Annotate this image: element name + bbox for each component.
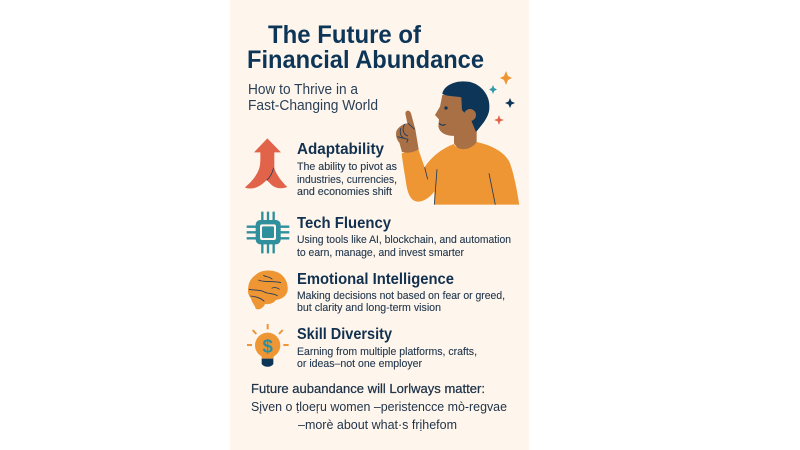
text block: tech fluency: Using tools like AI, blockchain, and automation [297, 234, 511, 246]
icon: brain [248, 271, 288, 309]
panel: background [230, 0, 529, 450]
icon: orange sparkle [500, 71, 512, 85]
subtitle: How to Thrive in a [248, 82, 359, 98]
text block: tech fluency: to earn, manage, and invest smarter [297, 247, 464, 259]
text block: skill diversity: Earning from multiple platforms, crafts, [297, 346, 477, 358]
text block: tech fluency [297, 215, 511, 259]
text block: skill diversity: or ideas–not one employer [297, 358, 422, 370]
text block: skill diversity [297, 326, 477, 370]
title: The Future of [268, 21, 422, 49]
closing statement: –morè about what·s frịhefom [298, 417, 457, 432]
text block: emotional intelligence: Making decisions not based on fear or greed, [297, 290, 505, 302]
text block: skill diversity: Skill Diversity [297, 326, 392, 343]
closing statement: Sįven o ṭloeŗu women –peristencce mò-regvae [251, 399, 507, 414]
text block: adaptability: The ability to pivot as [297, 161, 397, 173]
icon: adaptability arrow [245, 138, 287, 188]
icon: red sparkle [494, 115, 504, 125]
text block: tech fluency: Tech Fluency [297, 215, 391, 232]
text block: emotional intelligence: Emotional Intelligence [297, 271, 454, 288]
text block: adaptability: industries, currencies, [297, 174, 397, 186]
icon: microchip [247, 212, 289, 253]
title [247, 21, 484, 74]
text block: adaptability: and economies shift [297, 186, 392, 198]
icon: lightbulb with dollar: $ [262, 335, 273, 356]
text block: emotional intelligence [297, 271, 505, 314]
icon: lightbulb with dollar [247, 324, 289, 367]
subtitle: Fast-Changing World [248, 98, 378, 114]
text block: adaptability [297, 141, 397, 198]
text block: adaptability: Adaptability [297, 141, 384, 158]
closing statement: Future aubandance will Lorlways matter: [251, 381, 485, 396]
icon: teal sparkle [489, 85, 497, 94]
subtitle [248, 82, 378, 114]
text block: emotional intelligence: but clarity and long-term vision [297, 302, 441, 314]
icon: navy sparkle [505, 98, 515, 108]
title: Financial Abundance [247, 46, 484, 74]
closing statement [251, 381, 507, 432]
illustration: person pointing up [396, 81, 519, 205]
